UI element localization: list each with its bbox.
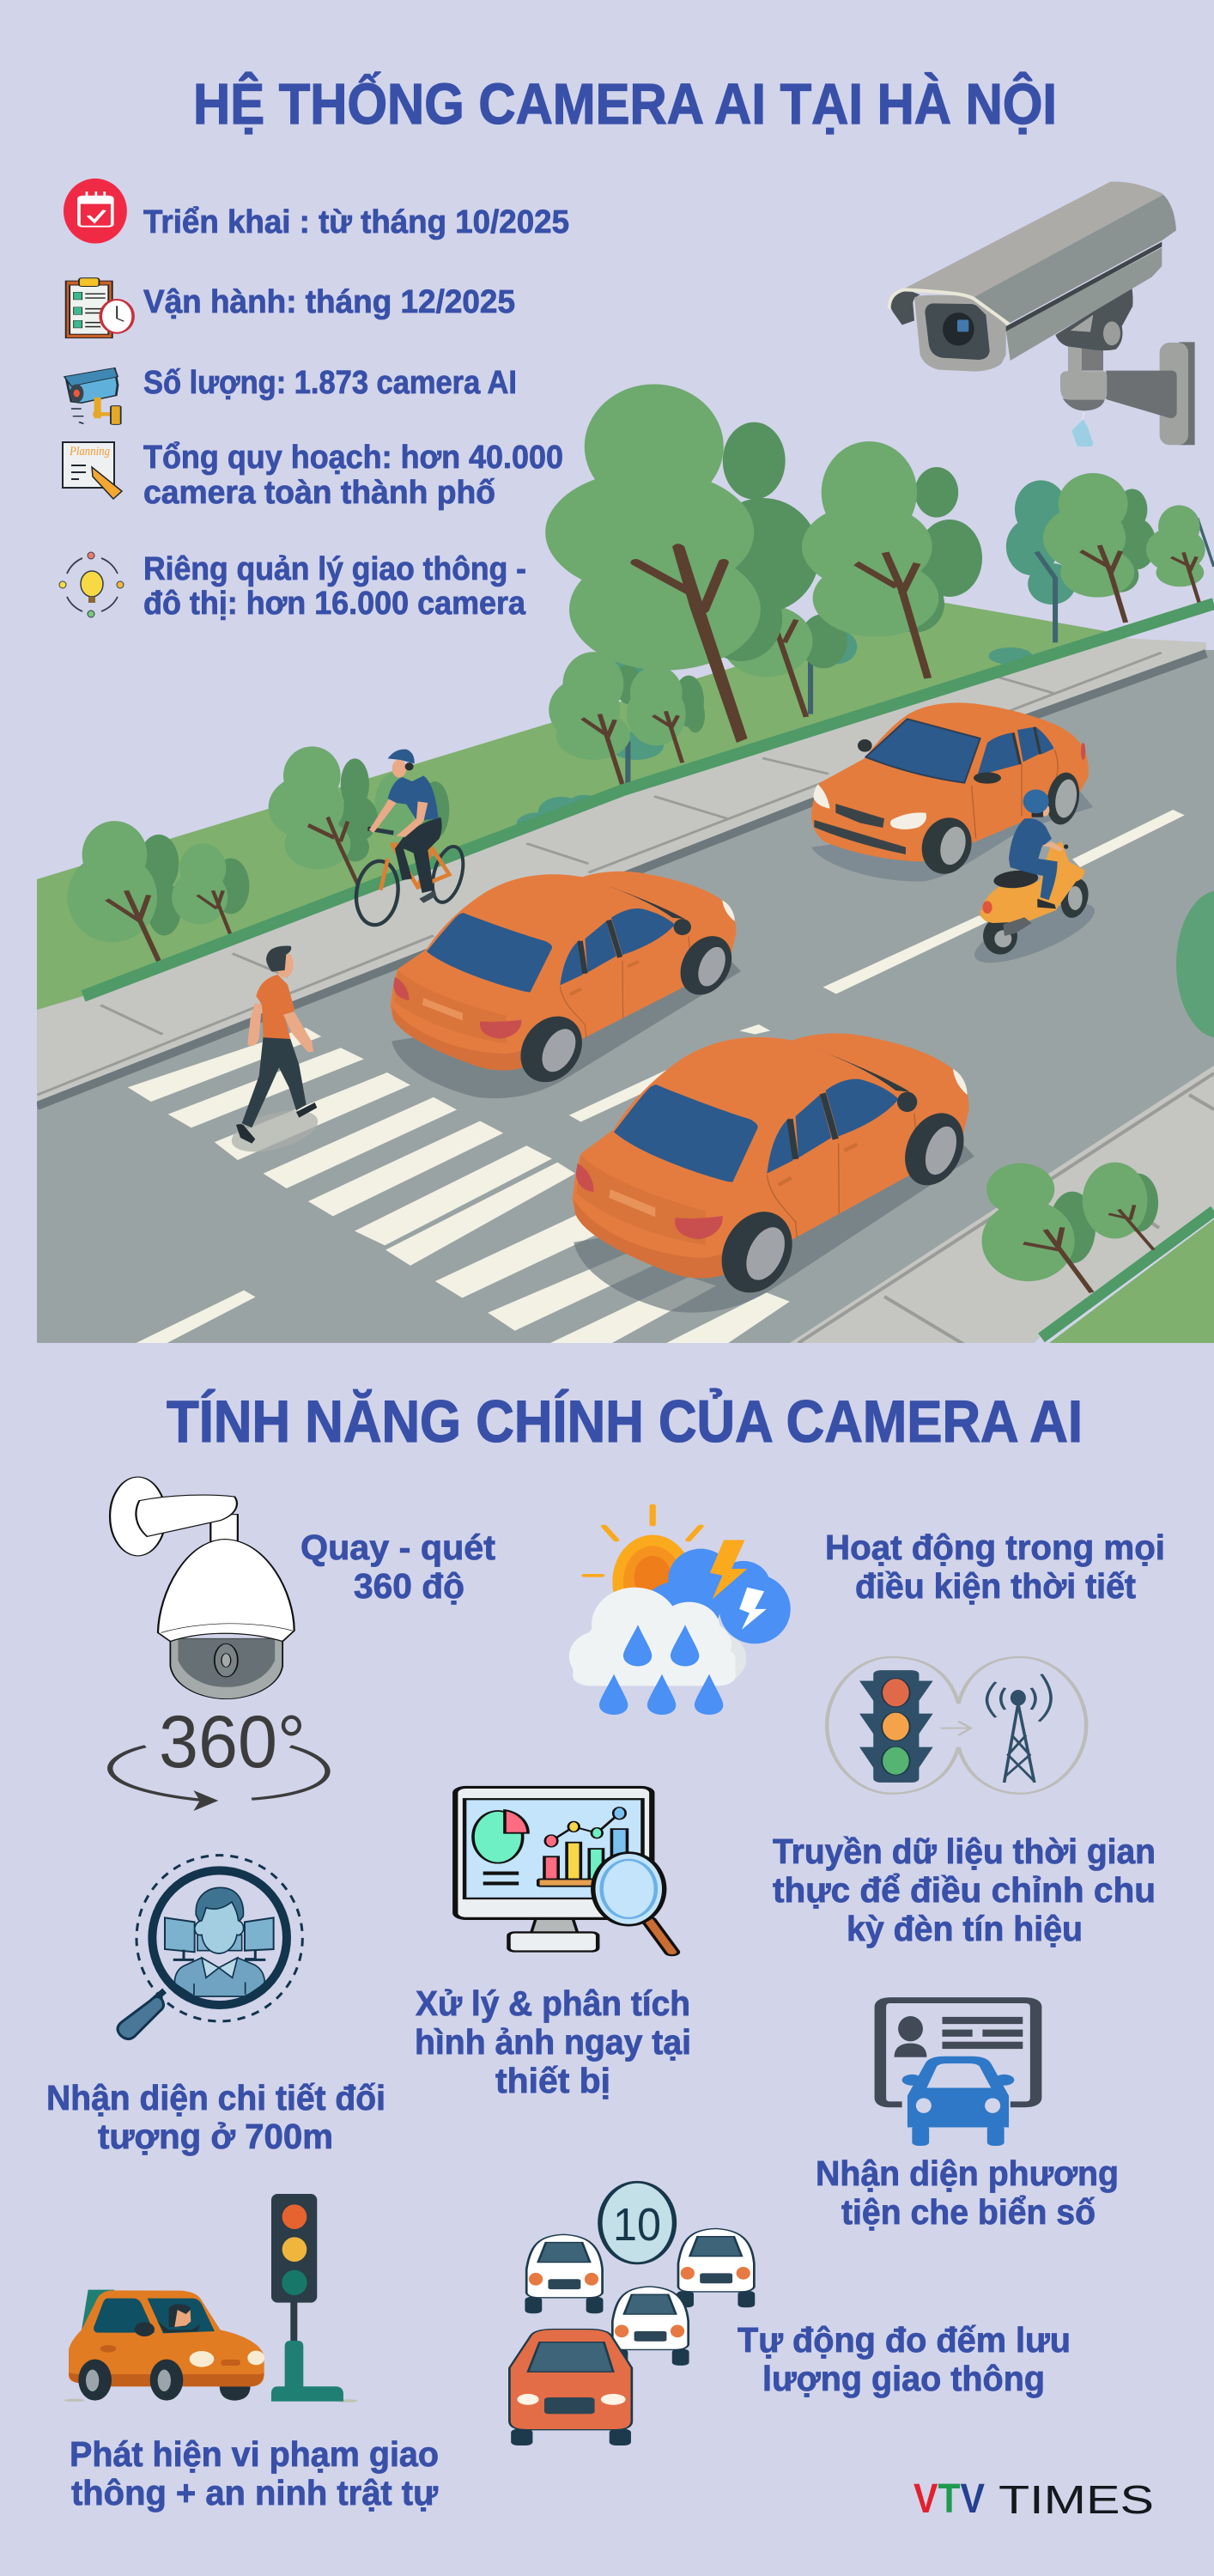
text: on device analysis: Xử lý & phân tích xyxy=(416,1984,690,2023)
text: covered plate detection: tiện che biển số xyxy=(841,2192,1096,2232)
text: overall plan: Tổng quy hoạch: hơn 40.000 xyxy=(143,440,563,476)
logo: VTV TIMES xyxy=(914,2476,1154,2522)
text: covered plate detection: Nhận diện phương xyxy=(816,2154,1119,2193)
text: real time data: Truyền dữ liệu thời gian xyxy=(773,1832,1156,1871)
sidewalk joints xyxy=(37,653,1162,1095)
icon: planning notebook: Planning xyxy=(69,445,110,459)
text: violation detection xyxy=(70,2434,439,2512)
illustration: security camera xyxy=(889,181,1195,447)
text: object recognition xyxy=(46,2078,385,2156)
text: violation detection: Phát hiện vi phạm giao xyxy=(70,2434,439,2474)
text: traffic counting: Tự động đo đếm lưu xyxy=(738,2320,1071,2360)
feature: object recognition xyxy=(46,1856,385,2156)
text: traffic cameras xyxy=(143,551,526,622)
tree at right edge xyxy=(1176,890,1214,1038)
car: front, top right xyxy=(811,702,1093,882)
icon: rotation arrows xyxy=(110,1747,327,1811)
car: rear large xyxy=(573,1034,975,1313)
icon: light bulb cycle xyxy=(59,552,124,617)
illustration: street scene xyxy=(37,384,1214,1348)
counter sign xyxy=(600,2182,674,2263)
text: on device analysis: hình ảnh ngay tại xyxy=(415,2022,691,2062)
icon label: 360 degrees: 360° xyxy=(159,1701,306,1783)
icon: face recognition magnifier xyxy=(118,1856,302,2039)
icon: car in front of id card xyxy=(880,2001,1036,2146)
text: object recognition: tượng ở 700m xyxy=(98,2117,333,2156)
text: all weather: Hoạt động trong mọi xyxy=(825,1528,1165,1567)
text: overall plan: camera toàn thành phố xyxy=(143,475,495,511)
icon: calendar xyxy=(64,179,127,244)
count number: 10 xyxy=(613,2199,661,2251)
far sidewalk and grass xyxy=(790,1066,1214,1348)
icon: clipboard with clock xyxy=(66,278,133,338)
text: rotate and scan: Quay - quét xyxy=(300,1528,495,1567)
text: traffic cameras: Riêng quản lý giao thông - xyxy=(143,551,526,587)
text: rollout date: Triển khai : từ tháng 10/2025 xyxy=(143,204,569,240)
text: traffic counting xyxy=(738,2320,1071,2398)
text: real time data: thực để điều chỉnh chu xyxy=(773,1870,1156,1910)
zebra crossing and lane markings xyxy=(128,810,1185,1343)
text: overall plan xyxy=(143,440,563,511)
title: HỆ THỐNG CAMERA AI TẠI HÀ NỘI xyxy=(193,71,1057,137)
text: camera count: Số lượng: 1.873 camera AI xyxy=(143,365,517,401)
panel: deployment facts xyxy=(59,179,569,622)
text: covered plate detection xyxy=(816,2154,1119,2232)
feature: traffic counting xyxy=(509,2182,1071,2445)
text: real time data: kỳ đèn tín hiệu xyxy=(847,1909,1083,1948)
icon: planning notebook xyxy=(63,442,122,499)
text: real time data xyxy=(773,1832,1156,1948)
text: traffic cameras: đô thị: hơn 16.000 camera xyxy=(143,586,526,622)
feature: covered plate detection xyxy=(816,2001,1119,2232)
icon: blue cctv camera xyxy=(64,368,121,424)
sidewalk xyxy=(37,637,1206,1102)
grass verge xyxy=(37,603,1106,1022)
text: traffic counting: lượng giao thông xyxy=(762,2359,1045,2398)
text: on device analysis xyxy=(415,1984,691,2100)
text: rotate and scan xyxy=(300,1528,495,1606)
text: operation date: Vận hành: tháng 12/2025 xyxy=(143,284,515,320)
camera housing xyxy=(889,181,1176,372)
icon: dome camera xyxy=(110,1477,294,1699)
text: object recognition: Nhận diện chi tiết đối xyxy=(46,2078,385,2117)
cyclist xyxy=(352,750,469,927)
car: rear middle xyxy=(391,872,742,1098)
icon: sun cloud and rain xyxy=(569,1506,791,1715)
wall mount xyxy=(1055,288,1195,447)
road edge shadow xyxy=(37,653,1206,1106)
road surface xyxy=(37,650,1214,1343)
icon: monitor with magnifier xyxy=(455,1787,672,1952)
feature: 360 rotation xyxy=(110,1477,495,1811)
scooter rider xyxy=(974,789,1095,963)
logo: VTV TIMES: TIMES xyxy=(999,2477,1154,2522)
feature: all weather xyxy=(569,1506,1165,1715)
pedestrian xyxy=(232,946,318,1152)
feature: violation detection xyxy=(64,2194,439,2512)
text: on device analysis: thiết bị xyxy=(495,2061,610,2100)
text: violation detection: thông + an ninh trật tự xyxy=(71,2473,438,2512)
icon: counter sign and cars xyxy=(509,2182,755,2445)
queue of cars xyxy=(509,2228,755,2445)
text: all weather: điều kiện thời tiết xyxy=(855,1566,1136,1606)
text: all weather xyxy=(825,1528,1165,1606)
grass curb xyxy=(83,604,1214,996)
icon: car at traffic light xyxy=(64,2194,358,2403)
feature: on device analysis xyxy=(415,1787,691,2100)
icon: traffic light and tower xyxy=(827,1657,1086,1794)
trees behind the curb xyxy=(67,384,1214,966)
section heading: TÍNH NĂNG CHÍNH CỦA CAMERA AI xyxy=(167,1388,1083,1455)
feature: real time data xyxy=(773,1657,1156,1948)
text: rotate and scan: 360 độ xyxy=(354,1566,464,1606)
trees near road xyxy=(981,1163,1158,1292)
logo: VTV TIMES: VTV xyxy=(914,2476,985,2522)
